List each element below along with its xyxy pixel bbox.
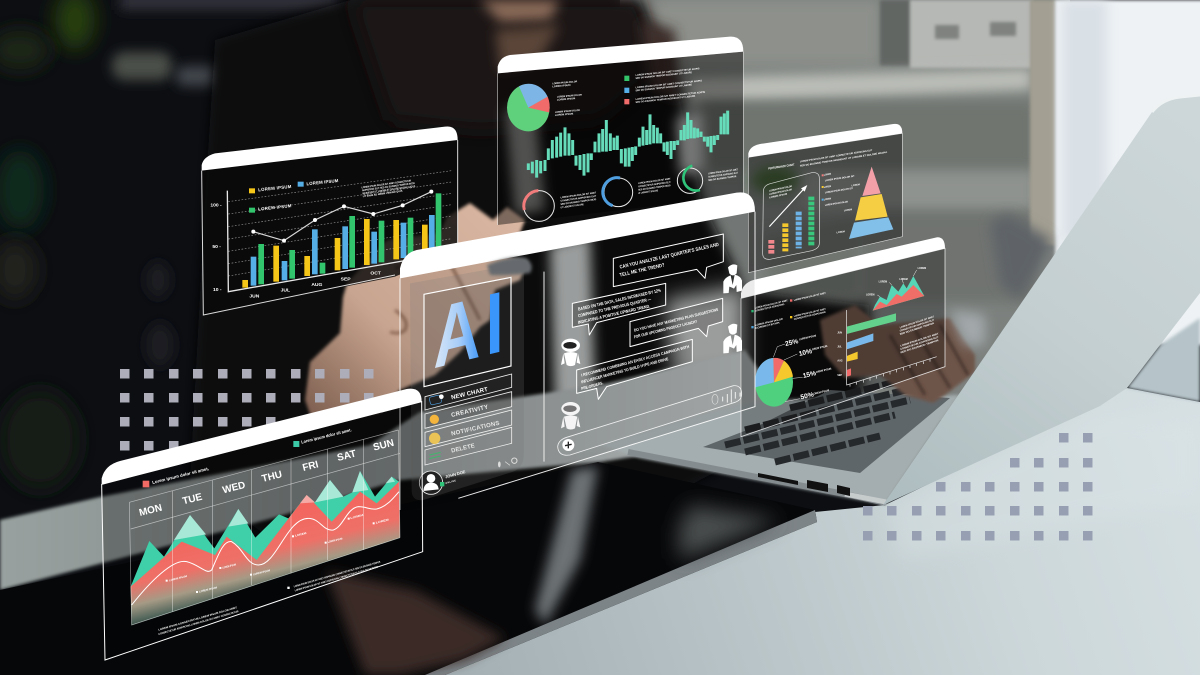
chat bubble: user follow-up: DO YOU HAVE ANY MARKETING PLAN SUGGESTIONS xyxy=(633,307,719,333)
panel: pie and histogram: LOREM IPSUM xyxy=(552,85,571,88)
histogram xyxy=(528,111,728,178)
menu list: CREATIVITY xyxy=(451,405,489,419)
chat bubble: AI answer: INDICATING A POSITIVE UPWARD TREND. xyxy=(577,303,651,325)
icon: robot one xyxy=(561,339,580,366)
panel: weekly area chart: THU xyxy=(261,469,283,485)
panel: weekly area chart: TUE xyxy=(181,492,204,507)
panel: performance chart: LOREM xyxy=(837,231,845,234)
horizontal bars: JUN xyxy=(837,332,842,334)
panel: weekly area chart: SAT xyxy=(336,449,357,464)
panel: pie and horizontal bars: LOREM IPSUM DOLOR SIT AMET xyxy=(794,292,827,302)
chart footnotes xyxy=(158,561,381,636)
mountain mini chart: LOREM xyxy=(879,281,887,283)
panel: pie and histogram: SED DO EIUSMOD TEMPOR INCIDIDUNT UT LABORE xyxy=(635,83,693,92)
panel: performance chart: LOREM IPSUM DOLOR SIT AMET CONSECTETUR ADIPISCING ELIT xyxy=(800,149,873,163)
panel: monthly bar chart: LOREM IPSUM xyxy=(306,178,339,186)
chart footnotes: LOREM IPSUM DOLOR SIT AMET ADIPISCING CONSECTETUR ELIT SED DO EIUSMOD TEMPOR xyxy=(293,561,381,588)
panel: weekly area chart: SUN xyxy=(372,438,395,454)
horizontal bars xyxy=(837,310,937,387)
user avatar: JOHN DOE xyxy=(445,469,466,479)
panel: performance chart: LOREM IPSUM xyxy=(769,194,788,199)
panel: performance chart: SED DO EIUSMOD TEMPOR INCIDIDUNT UT LABORE ET DOLORE MAGNA xyxy=(800,151,888,168)
pointing hand xyxy=(305,203,527,420)
panel: pie and histogram: LOREM IPSUM DOLOR SIT AMET xyxy=(638,177,671,185)
mountain mini chart xyxy=(866,268,926,311)
icon: person two xyxy=(723,324,742,353)
shirt highlights xyxy=(505,105,545,215)
day table xyxy=(129,430,400,625)
menu list: DELETE xyxy=(451,443,476,455)
progress rings xyxy=(524,166,703,221)
panel: pie and horizontal bars: LOREM IPSUM xyxy=(814,366,832,374)
panel: pie and horizontal bars: CONSECTETUR ADIPISCING ELIT xyxy=(900,336,940,351)
panel: monthly bar chart: LOREM IPSUM xyxy=(258,203,292,212)
AI logo xyxy=(433,274,504,387)
panel: pie and horizontal bars: LOREM IPSUM DOLOR SIT AMET xyxy=(755,299,789,310)
panel: pie and horizontal bars: 50% xyxy=(800,391,815,401)
panel: pie and histogram: CONSECTETUR ADIPISCING ELIT xyxy=(638,181,671,188)
user avatar: ONLINE xyxy=(445,480,457,485)
panel: pie and histogram: LOREM IPSUM DOLOR xyxy=(555,110,580,114)
panel: weekly area chart: LOREM xyxy=(295,531,308,538)
chat bubble: AI recommendation: INFLUENCER MARKETING TO BUILD HYPE AND DRIVE xyxy=(581,356,669,384)
panel: pie and histogram: SED DO EIUSMOD TEMPOR INCID xyxy=(638,185,671,192)
panel: pie and horizontal bars: CONSECTETUR ADIPISCING ELIT xyxy=(899,318,935,333)
AI logo: I xyxy=(486,274,504,374)
panel: pie and horizontal bars: CONSECTETUR ADIPISCING xyxy=(794,311,826,321)
chart legend xyxy=(143,427,352,487)
panel: pie and horizontal bars: LOREM IPSUM xyxy=(812,388,830,396)
panel: performance chart: PERFORMANCE CHART xyxy=(768,163,795,171)
panel: performance chart: LOREM xyxy=(824,186,831,189)
panel: pie and horizontal bars: LOREM IPSUM DOLOR SIT AMET xyxy=(899,315,935,329)
chart footnotes: LOREM IPSUM CONSECTETUR LOREM IPSUM DOLOR AMET xyxy=(158,606,238,632)
panel: weekly area chart: LOREM IPSUM xyxy=(169,574,188,582)
panel: performance chart: LOREM xyxy=(844,209,852,212)
panel: pie and horizontal bars: 15% xyxy=(802,370,817,380)
panel: pie and histogram: LOREM IPSUM xyxy=(555,113,573,117)
chart legend: Lorem ipsum dolor sit amet, xyxy=(152,466,210,485)
panel: pie and histogram: LOREM IPSUM DOLOR SIT AMET xyxy=(708,168,739,175)
panel: pie and horizontal bars: LOREM IPSUM xyxy=(799,333,817,341)
chat bubble: user question: CAN YOU ANALYZE LAST QUARTER'S SALES AND xyxy=(619,242,720,271)
mountain mini chart: LOREM xyxy=(866,295,874,297)
panel: weekly area chart: LOREM IPSUM xyxy=(222,562,237,570)
pen holder xyxy=(990,214,1052,300)
chart legend: Lorem ipsum dolor sit amet. xyxy=(301,427,352,445)
panel: AI chat assistant xyxy=(400,192,755,512)
panel: monthly bar chart: JUL xyxy=(281,287,290,293)
chat bubble: AI answer xyxy=(572,283,666,335)
panel: performance chart: LOREM xyxy=(824,198,831,201)
message input bar xyxy=(558,386,742,455)
panel: weekly area chart: LOREM xyxy=(375,517,390,525)
chat bubble: AI answer: BASED ON THE DATA, SALES INCREASED BY 12% xyxy=(577,288,661,312)
panel: pie and horizontal bars: CONSECTETUR ADIPISCING xyxy=(755,303,785,313)
panel: monthly bar chart: JUN xyxy=(249,293,260,299)
panel: pie and histogram: LOREM IPSUM DOLOR xyxy=(552,81,578,85)
panel: pie and histogram: LOREM IPSUM DOLOR SIT AMET CONSECTETUR ADIPIS xyxy=(635,79,703,89)
laptop base xyxy=(600,395,960,505)
panel: monthly bar chart: INCIDIDUNT UT LABORE ET DOLORE MAGNA ALIQUA xyxy=(362,185,416,195)
mountain mini chart: LOREM xyxy=(899,279,908,281)
chat bubble: user follow-up xyxy=(630,298,723,347)
panel: pie and horizontal bars: CONSECTETUR xyxy=(755,322,780,330)
panel: pie and histogram: SED DO EIUSMOD TEMPOR INCIDIDUNT UT LABORE xyxy=(635,71,693,80)
panel: pie and histogram: CONSECTETUR ADIPISCING ELIT xyxy=(560,195,597,203)
chat bubble: AI recommendation: PRE-ORDERS. xyxy=(581,380,604,391)
panel: pie and horizontal bars: 25% xyxy=(785,338,799,348)
menu list xyxy=(425,374,512,465)
panel: pie and horizontal bars: LOREM IPSUM DOLOR SIT AMET xyxy=(794,308,827,318)
panel: pie and histogram: LOREM IPSUM DOLOR SIT AMET CONSECTETUR ADIPIS xyxy=(635,67,700,77)
panel: weekly area chart: LOREM IPSUM xyxy=(253,568,271,576)
panel: pie and histogram: SED DO EIUSMOD TEMPOR xyxy=(708,176,737,182)
chat bubble: user question: TELL ME THE TREND? xyxy=(619,262,665,279)
chat bubble: AI recommendation xyxy=(577,339,692,399)
chat bubble: AI answer: COMPARED TO THE PREVIOUS QUARTER — xyxy=(577,296,652,318)
panel: weekly area chart: LOREM IPSUM xyxy=(327,536,343,544)
panel: performance chart: LOREM IPSUM DOLOR SIT xyxy=(825,176,855,182)
mountain mini chart: LOREM xyxy=(918,268,926,270)
dot grid right xyxy=(863,433,1092,540)
panel: pie and histogram xyxy=(498,37,743,225)
panel: monthly bar chart: SEP xyxy=(341,276,351,282)
panel: performance chart: LOREM IPSUM DOLOR xyxy=(769,189,793,196)
panel: pie and horizontal bars: SED DO EIUSMOD TEMPOR xyxy=(900,323,935,336)
chat bubble: AI recommendation: I RECOMMEND COMBINING AN EARLY ACCESS CAMPAIGN WITH xyxy=(581,344,690,378)
desk band xyxy=(0,350,800,590)
area series xyxy=(131,471,400,625)
panel: performance chart: LOREM xyxy=(824,174,831,177)
chat bubble: user follow-up: FOR OUR UPCOMING PRODUCT LAUNCH? xyxy=(633,319,698,339)
panel: weekly area chart xyxy=(102,389,423,660)
AI logo: A xyxy=(433,279,480,387)
panel: pie and horizontal bars: LOREM IPSUM DOLOR xyxy=(755,319,784,327)
panel: weekly area chart: LOREM IPSUM xyxy=(199,585,218,594)
stacked bars xyxy=(762,240,780,254)
panel: performance chart: LOREM xyxy=(852,184,860,187)
office shelves xyxy=(620,0,1200,420)
dot grid left xyxy=(120,369,374,450)
pie xyxy=(755,344,803,407)
chat bubble: user question xyxy=(613,234,723,287)
horizontal bars: AUG xyxy=(837,360,843,363)
laptop lid xyxy=(883,95,1200,505)
panel: performance chart: LOREM IPSUM DOLOR xyxy=(825,201,848,207)
panel: pie and histogram: LOREM IPSUM DOLOR xyxy=(557,94,582,99)
panel: pie and histogram: UT LABORE ET DOLORE xyxy=(638,189,659,195)
panel: weekly area chart: WED xyxy=(221,480,247,496)
fingernail of pointing hand xyxy=(487,257,532,275)
panel: monthly bar chart xyxy=(202,126,458,315)
panel: monthly bar chart: 50 - xyxy=(212,244,221,250)
panel: monthly bar chart: LOREM IPSUM xyxy=(258,184,292,192)
panel: monthly bar chart: OCT xyxy=(370,271,381,277)
panel: pie and histogram: LOREM IPSUM DOLOR SIT AMET xyxy=(560,191,597,199)
panel: pie and histogram: SED DO EIUSMOD TEMPOR INCIDIDUNT UT LABORE xyxy=(635,95,696,104)
panel: monthly bar chart: ADIPISCING ELIT SED DO EIUSMOD TEMPOR INCID xyxy=(362,182,415,192)
panel: pie and horizontal bars: 10% xyxy=(798,348,813,358)
horizontal bars: SEP xyxy=(837,375,842,377)
panel: monthly bar chart: UT ENIM AD MINIM VENIAM QUIS xyxy=(363,190,403,198)
person jacket and hair xyxy=(190,0,870,560)
growth arrow xyxy=(769,185,807,227)
panel: performance chart: LOREM IPSUM DOLOR SIT xyxy=(825,188,854,194)
panel: pie and horizontal bars: LOREM IPSUM xyxy=(810,344,828,352)
pie chart xyxy=(507,84,550,131)
panel: pie and histogram: UT LABORE ET DOLORE xyxy=(560,203,584,209)
horizontal bars: JUL xyxy=(837,347,842,349)
panel: pie and histogram: LOREM IPSUM DOLOR SIT AMET CONSECTETUR ADIPIS xyxy=(635,91,706,101)
chart footnotes: LOREM IPSUM DOLOR SIT AMET ADIPISCING CONSECTETUR ELIT SED DO EIUSMOD xyxy=(294,565,379,592)
panel: monthly bar chart: 100 - xyxy=(210,202,222,208)
panel: weekly area chart: MON xyxy=(138,503,163,519)
panel: monthly bar chart: LOREM IPSUM DOLOR SIT AMET CONSECTETUR xyxy=(361,179,411,189)
panel: pie and horizontal bars: LOREM IPSUM DOLOR SIT AMET xyxy=(900,332,940,348)
desk surface xyxy=(430,388,1200,675)
panel: pie and histogram: SED DO EIUSMOD TEMPOR INCID xyxy=(561,199,597,206)
menu list: NEW CHART xyxy=(451,387,489,401)
panel: monthly bar chart: 10 - xyxy=(213,287,222,293)
panel: weekly area chart: FRI xyxy=(301,459,320,474)
panel: pie and horizontal bars xyxy=(741,237,945,437)
icon: robot two xyxy=(561,402,580,429)
book behind the laptop xyxy=(1127,318,1200,402)
panel: performance chart: LOREM IPSUM DOLOR xyxy=(769,186,793,193)
panel: pie and histogram: LOREM IPSUM xyxy=(557,98,575,102)
panel: weekly area chart: LOREM xyxy=(350,513,365,520)
menu list: NOTIFICATIONS xyxy=(451,421,500,438)
panel: pie and horizontal bars: SED DO EIUSMOD TEMPOR xyxy=(900,340,939,354)
typing hand xyxy=(820,305,985,403)
user avatar xyxy=(419,458,517,494)
panel: monthly bar chart: AUG xyxy=(311,282,323,288)
panel: performance chart xyxy=(748,124,902,273)
foliage and chair on the left xyxy=(0,0,340,490)
panel: pie and histogram: CONSECTETUR ADIPISCING ELIT xyxy=(708,171,739,179)
pyramid xyxy=(849,167,893,239)
keyboard xyxy=(703,370,950,473)
tablet xyxy=(0,462,817,675)
chart footnotes: CONSECTETUR ADIPISCING LOREM DOLOR SIT AMET CONSECTETUR xyxy=(158,610,239,636)
icon: person one xyxy=(723,264,742,293)
sidebar card xyxy=(410,265,524,500)
